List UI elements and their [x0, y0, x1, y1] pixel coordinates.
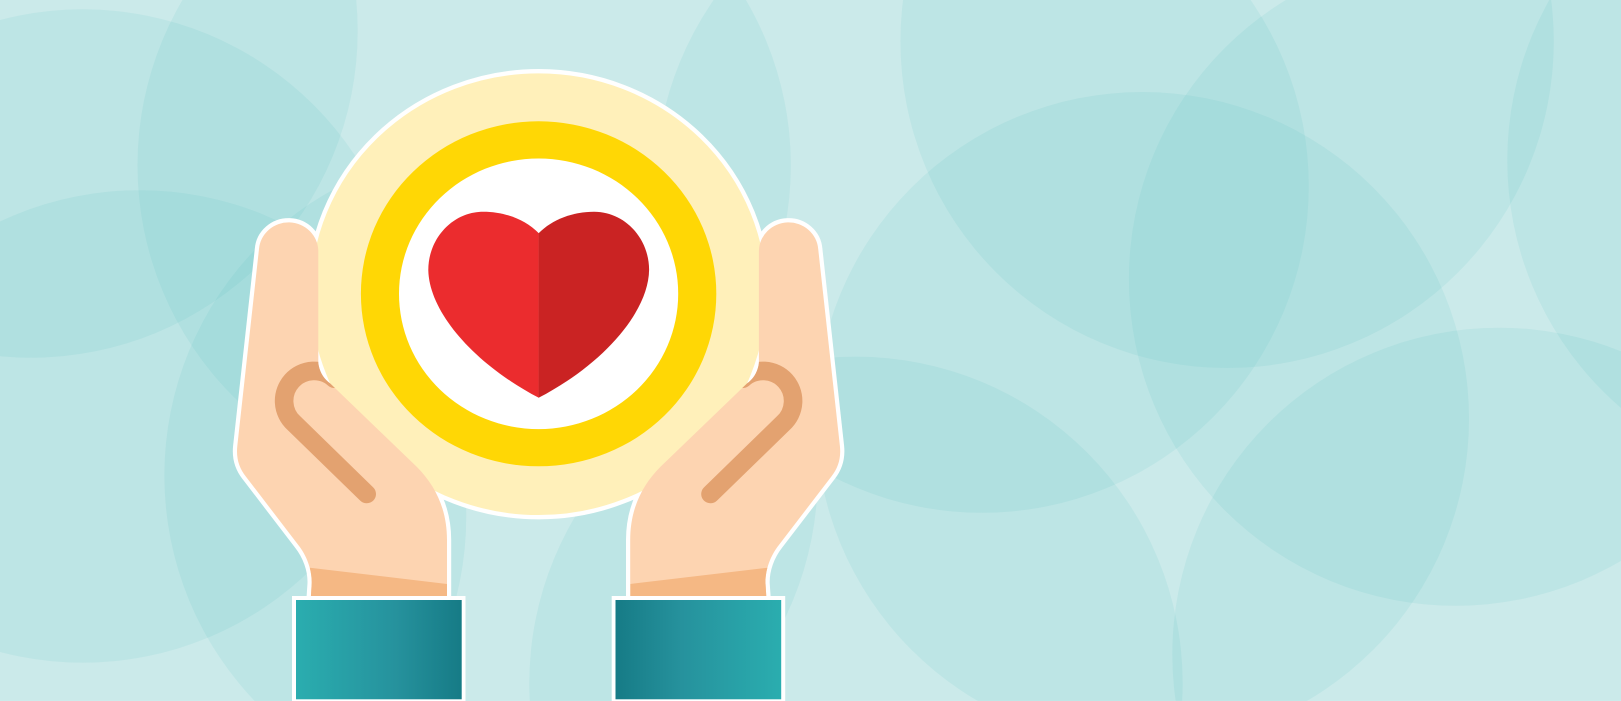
icon: heart: [428, 212, 649, 398]
left hand: [237, 222, 447, 601]
badge: concentric circles: [309, 71, 769, 517]
right hand: [630, 222, 840, 601]
hand outlines (white stroke behind the badge): [237, 222, 840, 598]
left cuff: [292, 596, 466, 701]
right cuff: [612, 596, 785, 701]
